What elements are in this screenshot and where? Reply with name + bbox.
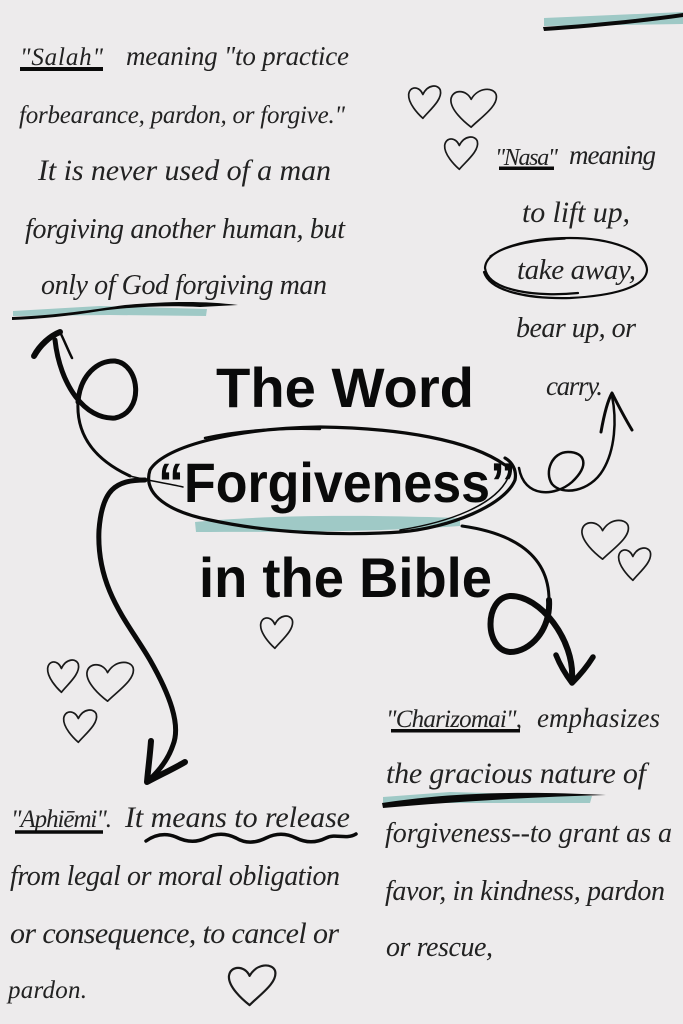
heart: bottom (229, 965, 275, 1005)
text: Nasa line 1: meaning (569, 140, 656, 170)
arrow: to Salah (34, 332, 183, 487)
term: Nasa: "Nasa" (495, 145, 559, 171)
panel: Salah definition (12, 41, 349, 320)
text: Charizomai line 4: favor, in kindness, pardon (385, 876, 665, 907)
hearts: left group (48, 660, 133, 742)
wavy underline (146, 834, 356, 842)
term: Salah: "Salah" (20, 44, 104, 71)
heart: center (261, 616, 293, 648)
title line 1: The Word (216, 356, 474, 419)
text: Salah meaning line 4: forgiving another human, but (25, 214, 346, 245)
panel: Aphiemi definition (6, 801, 356, 1004)
text: Nasa line 4: bear up, or (516, 313, 636, 344)
circle: Forgiveness (149, 427, 515, 534)
arrow: to Charizomai (462, 526, 593, 683)
brush stroke: top right (543, 12, 683, 31)
term: Aphiemi: "Aphiēmi". (11, 806, 112, 833)
panel: Nasa definition (484, 140, 656, 401)
text: Aphiemi line 4: pardon. (6, 977, 87, 1004)
text: Nasa line 3: take away, (517, 254, 636, 286)
text: Salah meaning line 5: only of God forgiving man (41, 270, 327, 301)
term: Charizomai: "Charizomai", (386, 706, 522, 733)
arrow: to Nasa (519, 393, 632, 492)
text: Charizomai line 2: the gracious nature of (386, 757, 650, 790)
hearts: right group (582, 520, 651, 580)
title line 2: “Forgiveness” (158, 451, 516, 514)
brush stroke: Salah highlight (12, 302, 238, 320)
brush stroke: Charizomai highlight (382, 792, 606, 808)
title (158, 356, 516, 609)
text: Charizomai line 5: or rescue, (386, 932, 493, 963)
arrow: to Aphiemi (99, 480, 185, 782)
text: Aphiemi line 2: from legal or moral obligation (10, 861, 340, 892)
text: Charizomai line 1: emphasizes (537, 703, 660, 733)
text: Salah meaning line 1: meaning "to practice (126, 41, 349, 71)
text: Nasa line 2: to lift up, (522, 196, 630, 229)
text: Aphiemi line 3: or consequence, to cancel or (10, 917, 339, 950)
title line 3: in the Bible (199, 546, 492, 609)
hearts: top group (409, 86, 496, 169)
text: Salah meaning line 3: It is never used of a man (37, 154, 331, 187)
text: Aphiemi line 1: It means to release (124, 801, 350, 834)
text: Charizomai line 3: forgiveness--to grant as a (385, 818, 672, 849)
panel: Charizomai definition (382, 703, 672, 963)
text: Salah meaning line 2: forbearance, pardon, or forgive." (19, 102, 346, 129)
circle: take away (484, 238, 647, 298)
brush stroke: title highlight (195, 516, 460, 532)
text: Nasa line 5: carry. (546, 371, 603, 401)
